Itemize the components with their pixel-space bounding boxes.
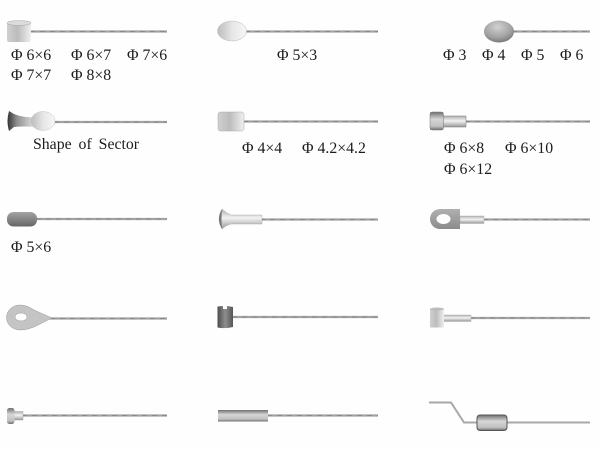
wire: [267, 414, 378, 417]
icon: pill head: [7, 212, 37, 226]
wire: [22, 414, 167, 417]
wire: [465, 120, 590, 123]
panel: pill head cable, 5x6: [7, 212, 167, 256]
wire: [483, 218, 590, 221]
wire: [470, 317, 590, 319]
wire: [243, 120, 378, 123]
size labels: Φ 4: [482, 47, 505, 64]
panel: cylinder head cable, 6x6 to 8x8: [7, 21, 167, 84]
size labels: Φ 4.2×4.2: [302, 140, 366, 157]
size labels: Φ 6×8: [444, 140, 484, 157]
panel: cylinder with long sleeve cable: [430, 308, 590, 328]
icon: slotted head: [218, 306, 233, 328]
panel: teardrop eye cable: [7, 305, 167, 330]
size labels: Φ 6×6: [11, 47, 51, 64]
wire: [232, 316, 378, 318]
panel: stepped head cable: [7, 408, 167, 424]
icon: teardrop eye: [7, 305, 52, 330]
wire: [50, 317, 167, 320]
icon: stepped head: [7, 408, 23, 424]
icon: collared head: [430, 112, 466, 130]
size labels: [444, 140, 553, 178]
icon: sector head: [8, 111, 55, 131]
icon: oval head: [218, 21, 246, 41]
size labels: Φ 6: [560, 47, 583, 64]
panel: lug head cable: [430, 209, 590, 229]
size labels: Φ 7×6: [127, 47, 167, 64]
wire: [260, 218, 378, 221]
size label: Φ 5×3: [277, 47, 317, 64]
icon: ball head: [484, 20, 514, 42]
icon: long tube: [218, 410, 268, 422]
wire: [30, 30, 167, 33]
icon: lug with hole: [430, 209, 460, 229]
size labels: [11, 47, 167, 84]
size label: Φ 5×6: [11, 239, 51, 256]
wire: [245, 30, 378, 33]
panel: oval head cable, 5x3: [218, 21, 378, 64]
panel: long tube cable: [218, 410, 378, 422]
size labels: Φ 4×4: [242, 140, 282, 157]
panel: slotted head cable: [218, 306, 378, 328]
size labels: Φ 7×7: [11, 67, 51, 84]
wire: [36, 218, 167, 220]
wire: [512, 30, 590, 33]
panel: ball head cable, 3 to 6: [443, 20, 590, 64]
size labels: Φ 3: [443, 47, 466, 64]
label: Shape of Sector: [33, 136, 140, 153]
size labels: Φ 6×12: [444, 161, 492, 178]
icon: sleeve: [443, 315, 471, 322]
panel: small cylinder cable, 4x4: [218, 112, 378, 157]
size labels: Φ 6×7: [71, 47, 111, 64]
size labels: Φ 8×8: [71, 67, 111, 84]
wire: [54, 121, 167, 123]
panel: sector head cable: [8, 111, 167, 153]
icon: barrel: [477, 415, 507, 430]
panel: bent wire with barrel: [429, 402, 590, 430]
icon: small cylinder head: [218, 112, 244, 131]
bent wire: [429, 402, 590, 422]
icon: cylinder head: [7, 21, 31, 42]
size labels: Φ 6×10: [505, 140, 553, 157]
panel: flared head cable: [219, 209, 378, 229]
size labels: [242, 140, 366, 157]
size labels: [443, 47, 583, 64]
icon: flared head with sleeve: [219, 209, 262, 229]
icon: sleeve: [460, 216, 484, 224]
size labels: Φ 5: [521, 47, 544, 64]
panel: collared head cable, 6x8 to 6x12: [430, 112, 590, 178]
icon: cylinder head: [430, 308, 444, 328]
